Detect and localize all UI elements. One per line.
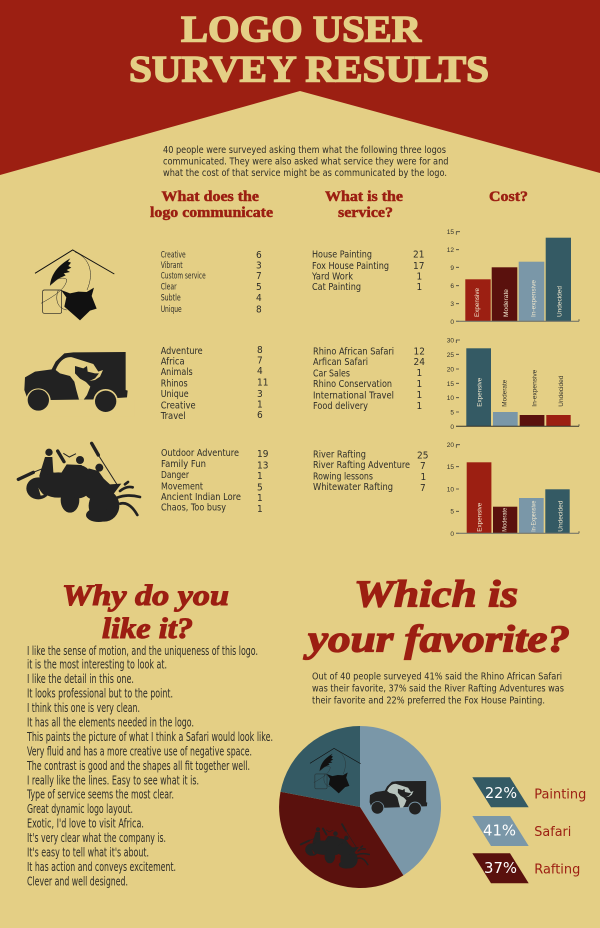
icon: river rafting logo [18,443,140,522]
list: logo 1 communicates: 6 [256,250,262,261]
heading: what does the logo communicate: logo communicate [150,205,274,221]
heading: which is your favorite [303,574,570,661]
intro text [163,145,448,179]
text block: reasons list: This paints the picture of what I think a Safari would look like. [26,730,273,744]
bar chart: logo 2 cost [447,338,579,431]
list: logo 3 communicates: 19 [257,449,269,460]
list: logo 1 service: House Painting [312,250,372,260]
heading: what does the logo communicate: What does the [162,189,260,205]
list: logo 2 service: 1 [416,390,422,401]
intro text: 40 people were surveyed asking them what the following three logos [163,145,446,156]
bar chart: logo 3 cost: Undecided [558,500,564,532]
list: logo 3 service: Whitewater Rafting [313,482,393,493]
list: logo 1 communicates: Custom service [161,272,206,282]
heading: why do you like it: Why do you [62,579,229,612]
bar chart: logo 1 cost: 6 [450,283,454,290]
text block: reasons list: It has all the elements needed in the logo. [27,716,194,730]
bar chart: logo 2 cost: In-expensive [532,369,538,407]
list: logo 3 communicates: Movement [161,482,203,492]
bar chart: logo 1 cost: 15 [447,229,454,236]
list: logo 3 service: River Rafting Adventure [313,460,410,471]
legend: safari [472,816,571,846]
bar chart: logo 3 cost [447,442,579,538]
list: logo 3 communicates: 1 [257,471,263,482]
bar chart: logo 1 cost [447,229,579,326]
legend: painting: Painting [534,788,586,802]
bar chart: logo 1 cost: Moderate [503,289,510,317]
title: SURVEY RESULTS [129,50,489,90]
list: logo 1 communicates: 3 [256,260,262,272]
list: logo 1 communicates: Unique [161,305,182,315]
title [129,10,489,90]
legend: painting [472,777,586,807]
list: logo 3 communicates: 5 [257,482,263,494]
heading: which is your favorite: Which is [354,574,518,616]
list: logo 2 service: 24 [414,357,425,368]
text block: reasons list: Type of service seems the most clear. [26,788,174,802]
bar chart: logo 3 cost: 5 [450,508,454,516]
list: logo 3 service: 7 [420,461,426,472]
bar chart: logo 1 cost: 9 [450,265,454,272]
bar chart: logo 2 cost: 20 [447,366,454,374]
bar chart: logo 1 cost: In-expensive [530,280,538,317]
bar chart: logo 2 cost: 5 [450,410,454,416]
list: logo 1 service: 1 [416,282,422,293]
text block: reasons list: Clever and well designed. [27,874,128,888]
list: logo 2 communicates: Travel [160,411,186,422]
heading: what is the service [325,189,404,221]
text block: reasons list: I think this one is very clean. [27,701,140,715]
bar chart: logo 1 cost: 3 [450,301,454,308]
legend: safari: 41% [483,822,516,840]
bar chart: logo 2 cost: 25 [447,352,454,359]
bar chart: logo 3 cost: 15 [447,464,454,471]
list: logo 1 communicates: 5 [256,282,262,293]
list: logo 2 communicates: Adventure [161,346,203,357]
text block: favorite summary: their favorite and 22% preferred the Fox House Painting. [312,696,545,706]
list: logo 2 service: Rhino Conservation [313,379,392,390]
intro text: what the cost of that service might be as communicated by the logo. [163,168,447,179]
text block: reasons list: It looks professional but to the point. [27,686,173,700]
heading: why do you like it [62,579,229,645]
heading: which is your favorite: your favorite? [303,619,570,661]
list: logo 1 communicates: Clear [161,283,177,293]
list: logo 1 service: 17 [413,261,424,272]
text block: reasons list: Exotic, I'd love to visit Africa. [27,816,144,830]
text block: reasons list: It's very clear what the company is. [27,831,166,845]
list: logo 3 communicates: Ancient Indian Lore [161,492,241,503]
bar chart: logo 2 cost: 30 [447,338,454,344]
intro text: communicated. They were also asked what service they were for and [163,156,448,168]
text block: reasons list: It has action and conveys excitement. [27,860,176,874]
icon: rhino safari truck logo [22,352,135,417]
pie chart: favorite logos [279,726,441,888]
text block: favorite summary [312,672,564,706]
list: logo 2 communicates: 7 [257,356,263,366]
list: logo 3 service: 25 [417,450,428,462]
list: logo 1 service: Cat Painting [312,282,361,293]
list: logo 1 service [311,250,424,293]
list: logo 3 service: 7 [420,483,426,494]
bar chart: logo 2 cost: 10 [447,395,454,402]
list: logo 3 communicates: Chaos, Too busy [161,502,226,514]
list: logo 2 service: 1 [416,368,422,379]
list: logo 2 communicates: Animals [161,367,193,378]
list: logo 2 communicates: Unique [161,389,189,400]
heading: what is the service: service? [338,205,393,221]
text block: reasons list: Great dynamic logo layout. [27,802,133,816]
bar chart: logo 3 cost: In-Expensive [530,500,538,532]
list: logo 3 communicates: Danger [161,470,190,481]
legend: rafting: 37% [484,859,517,877]
bar chart: logo 2 cost: 0 [450,424,454,431]
list: logo 2 communicates: 11 [257,378,268,388]
list: logo 2 service: Car Sales [313,368,350,380]
list: logo 2 communicates: Creative [161,400,196,412]
text block: reasons list: I like the sense of motion, and the uniqueness of this logo. [27,644,258,658]
bar chart: logo 3 cost: 10 [447,486,454,494]
list: logo 2 service: Rhino African Safari [313,346,394,358]
title: LOGO USER [181,10,422,50]
bar chart: logo 2 cost: Undecided [558,375,565,407]
bar chart: logo 3 cost: 20 [447,442,454,449]
bar chart: logo 1 cost: Expensive [474,288,481,317]
list: logo 1 communicates: 7 [256,271,262,282]
heading: cost: Cost? [489,189,528,205]
text block: reasons list: It's easy to tell what it's about. [27,846,149,860]
list: logo 2 service: 1 [416,379,422,390]
bar chart: logo 1 cost: 0 [450,319,454,326]
list: logo 3 communicates [161,448,269,515]
legend: safari: Safari [534,825,571,840]
bar chart: logo 3 cost: Moderate [502,507,508,532]
red roof banner [0,0,600,175]
list: logo 3 communicates: Family Fun [161,459,206,470]
text block: reasons list: Very fluid and has a more creative use of negative space. [27,744,252,758]
list: logo 2 communicates: 4 [257,366,263,377]
list: logo 3 communicates: 1 [257,504,263,515]
list: logo 1 communicates: 4 [256,293,262,304]
list: logo 2 communicates: 8 [257,345,263,356]
list: logo 3 communicates: 1 [257,493,263,504]
list: logo 1 communicates [161,250,262,316]
list: logo 3 service: Rowing lessons [313,472,373,482]
list: logo 2 service: International Travel [313,390,394,402]
list: logo 1 communicates: Creative [161,250,186,260]
legend: rafting [472,853,580,883]
icon: fox house painting logo [35,250,114,320]
heading: what is the service: What is the [325,189,404,205]
text block: reasons list: I like the detail in this one. [27,672,134,686]
list: logo 2 communicates: 3 [257,389,263,400]
list: logo 1 communicates: Subtle [161,294,181,304]
bar chart: logo 2 cost: 15 [447,381,454,388]
list: logo 1 service: Yard Work [311,272,353,282]
bar chart: logo 3 cost: Expensive [476,502,484,532]
heading: what does the logo communicate [150,189,274,221]
list: logo 3 service: River Rafting [313,450,366,460]
list: logo 2 service: 12 [414,346,425,358]
list: logo 1 service: 1 [416,272,422,282]
list: logo 1 service: 21 [413,250,424,260]
bar chart: logo 2 cost: Expensive [476,377,484,407]
bar chart: logo 3 cost: 0 [450,531,454,538]
bar chart: logo 1 cost: Undecided [556,286,564,317]
bar chart: logo 2 cost: Moderate [502,379,508,407]
text block: reasons list: The contrast is good and the shapes all fit together well. [26,759,250,773]
text block: reasons list: I really like the lines. Easy to see what it is. [27,774,199,788]
list: logo 1 service: Fox House Painting [312,261,389,272]
legend: rafting: Rafting [534,862,580,878]
list: logo 2 communicates: Rhinos [161,378,188,390]
list: logo 2 communicates: Africa [161,356,185,368]
list: logo 3 service [313,450,428,494]
list: logo 2 service: Arfican Safari [313,357,368,368]
heading: why do you like it: like it? [102,612,193,645]
list: logo 3 service: 1 [420,472,426,483]
bar chart: logo 1 cost: 12 [447,247,454,254]
list: logo 2 service [313,346,425,412]
list: logo 3 communicates: 13 [257,460,268,472]
list: logo 2 communicates: 6 [257,410,263,421]
text block: reasons list: it is the most interesting to look at. [27,658,167,672]
list: logo 1 communicates: 8 [256,304,262,316]
text block: reasons list [26,644,273,888]
list: logo 2 service: Food delivery [313,401,368,412]
list: logo 2 communicates [160,345,268,422]
list: logo 1 communicates: Vibrant [161,261,183,271]
list: logo 3 communicates: Outdoor Adventure [161,448,239,459]
legend: painting: 22% [485,784,517,802]
list: logo 2 service: 1 [416,401,422,412]
list: logo 2 communicates: 1 [257,400,263,410]
